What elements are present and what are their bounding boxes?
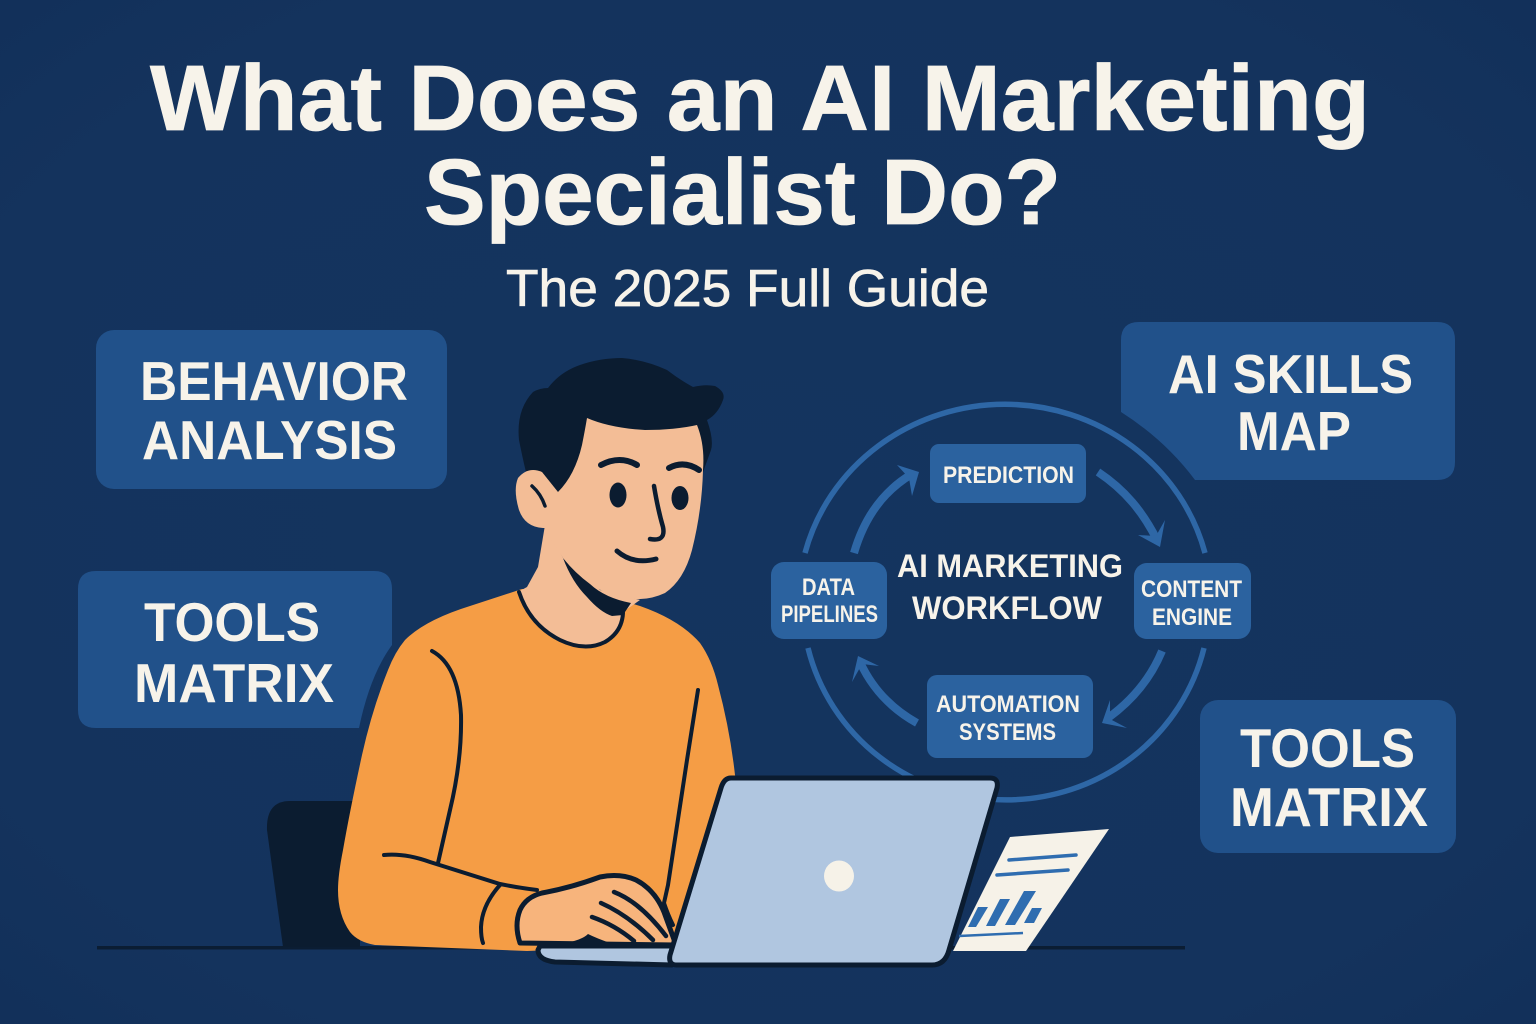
laptop logo <box>824 860 854 892</box>
illustration: specialist <box>338 358 740 951</box>
laptop <box>538 778 997 965</box>
outer ring lower arc <box>808 648 1204 800</box>
panel: behavior analysis: BEHAVIOR <box>140 350 408 412</box>
workflow center label: AI MARKETING <box>897 548 1123 584</box>
cuff line <box>481 885 500 943</box>
face <box>545 418 703 599</box>
panel: tools matrix left: MATRIX <box>134 652 334 714</box>
icon: chair <box>267 801 360 947</box>
panel: tools matrix left <box>78 571 392 728</box>
panel: behavior analysis <box>96 330 447 489</box>
ear line <box>532 486 545 506</box>
node: data pipelines: DATA <box>802 574 855 601</box>
workflow center label: WORKFLOW <box>912 590 1103 626</box>
node: data pipelines <box>771 562 887 639</box>
document text lines <box>997 855 1076 875</box>
neck shadow <box>563 558 631 616</box>
node: automation systems <box>927 675 1093 758</box>
nose <box>650 486 663 540</box>
node: data pipelines: PIPELINES <box>781 601 878 628</box>
node: content engine: ENGINE <box>1152 604 1232 631</box>
mini bar chart <box>968 891 1042 927</box>
node: content engine <box>1134 563 1251 639</box>
chart: AI marketing workflow cycle <box>771 404 1251 800</box>
mouth <box>617 551 656 561</box>
palm shadow <box>565 934 610 943</box>
node: automation systems: SYSTEMS <box>959 719 1056 746</box>
panel: AI skills map <box>1121 322 1455 480</box>
node: prediction <box>930 444 1086 503</box>
node: automation systems: AUTOMATION <box>936 691 1080 718</box>
node: prediction: PREDICTION <box>943 462 1074 489</box>
panel: tools matrix right: MATRIX <box>1230 776 1428 838</box>
panel: AI skills map: AI SKILLS <box>1168 343 1413 405</box>
arrow: content engine to automation systems <box>1102 651 1162 728</box>
torso right line <box>664 690 698 925</box>
title: What Does an AI Marketing <box>150 46 1370 150</box>
laptop base <box>538 946 672 965</box>
title <box>150 46 1370 244</box>
desk line <box>97 946 1185 950</box>
arrow: automation systems to data pipelines <box>852 656 917 723</box>
subtitle: The 2025 Full Guide <box>506 260 989 318</box>
eyes <box>610 482 688 510</box>
fingers <box>592 892 666 941</box>
title: Specialist Do? <box>424 140 1061 244</box>
ear <box>516 470 558 528</box>
neck <box>518 525 640 647</box>
panel: AI skills map: MAP <box>1237 400 1351 462</box>
panel: tools matrix left: TOOLS <box>144 591 320 653</box>
laptop lid <box>670 778 997 965</box>
hair <box>519 358 724 492</box>
collar <box>519 592 623 647</box>
hand <box>517 876 676 945</box>
arrow: prediction to content engine <box>1098 472 1165 547</box>
forearm line <box>384 855 537 890</box>
document with bar chart <box>953 829 1109 951</box>
workflow center label <box>897 548 1123 626</box>
panel: tools matrix right <box>1200 700 1456 853</box>
eyebrows <box>601 460 699 470</box>
sweater <box>338 589 740 951</box>
node: content engine: CONTENT <box>1141 576 1242 603</box>
arrow: data pipelines to prediction <box>854 465 919 553</box>
panel: tools matrix right: TOOLS <box>1240 717 1415 779</box>
sleeve line <box>432 651 461 863</box>
panel: behavior analysis: ANALYSIS <box>142 409 397 471</box>
outer ring upper arc <box>805 404 1205 553</box>
